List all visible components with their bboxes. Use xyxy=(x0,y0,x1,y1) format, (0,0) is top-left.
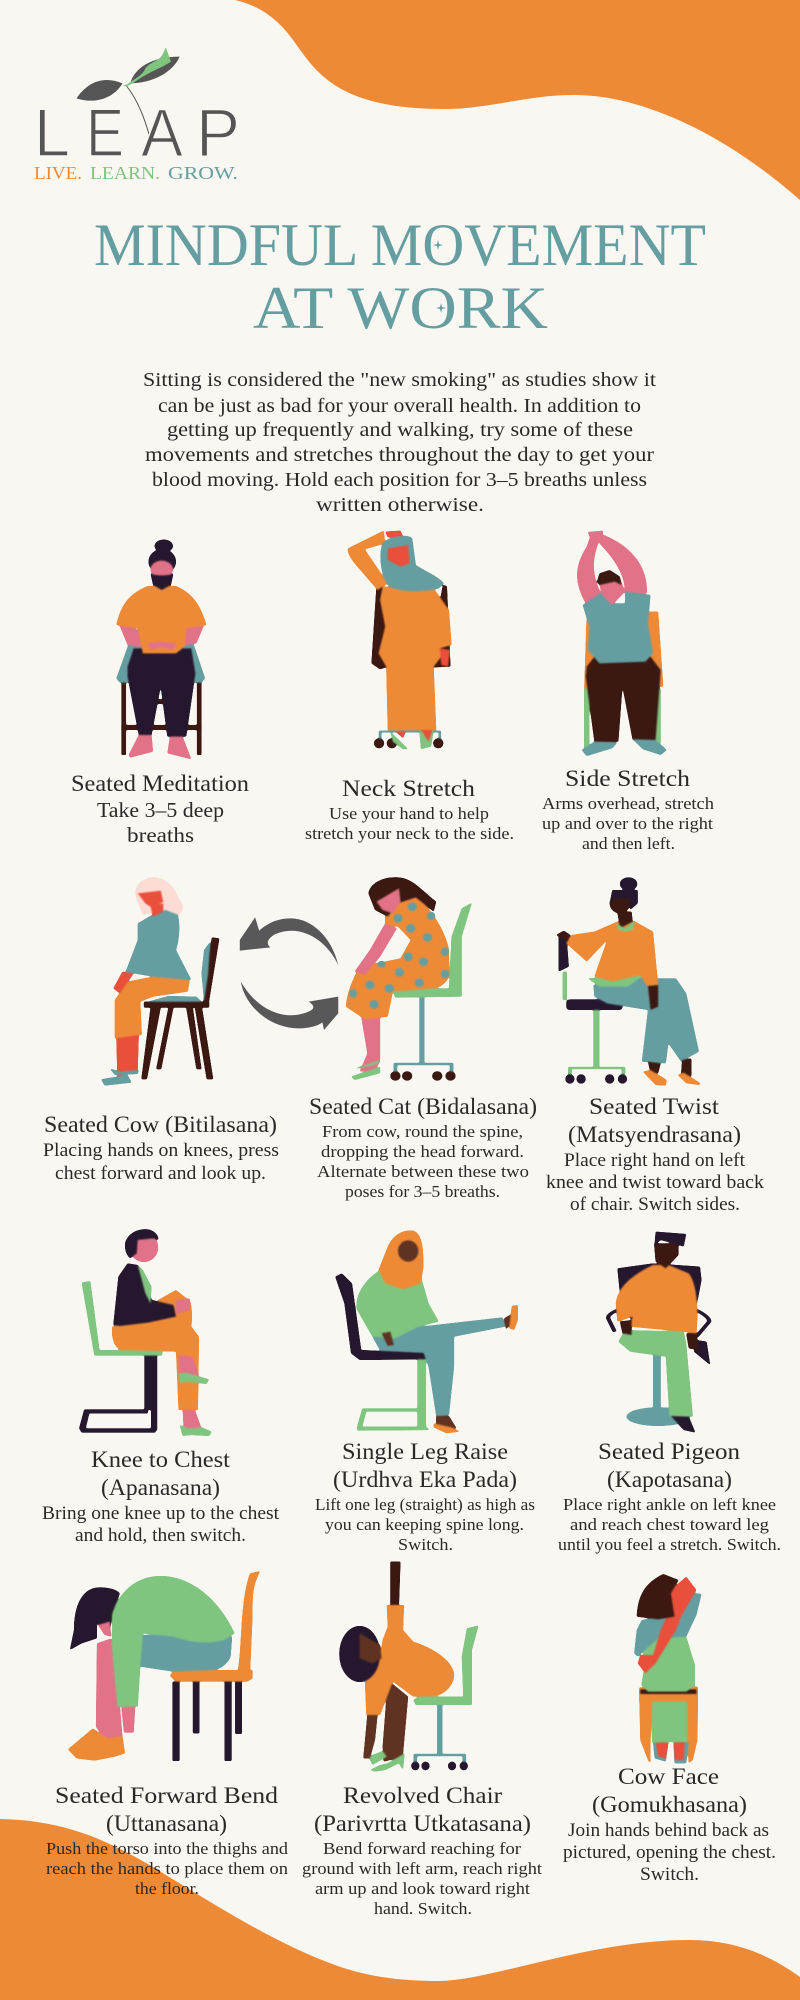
caption: Place right ankle on left knee xyxy=(563,1495,776,1514)
panel: side stretch xyxy=(542,531,715,853)
wordmark xyxy=(34,95,240,171)
caption: of chair. Switch sides. xyxy=(570,1194,740,1215)
tagline: LEARN. xyxy=(90,163,160,183)
intro paragraph: Sitting is considered the "new smoking" as studies show it xyxy=(143,369,656,391)
caption xyxy=(42,1447,280,1546)
caption xyxy=(315,1439,535,1554)
figure: woman twisting forward with arm raised xyxy=(339,1562,479,1772)
caption: until you feel a stretch. Switch. xyxy=(558,1535,781,1554)
tagline: LIVE. xyxy=(34,163,82,183)
caption: From cow, round the spine, xyxy=(322,1122,523,1141)
caption: Revolved Chair xyxy=(343,1783,502,1808)
caption: Bring one knee up to the chest xyxy=(42,1503,280,1524)
caption: Use your hand to help xyxy=(329,804,489,823)
wordmark: L xyxy=(34,95,70,171)
caption xyxy=(46,1783,289,1898)
caption: Seated Cat (Bidalasana) xyxy=(309,1094,537,1119)
title: MINDFUL MOVEMENT xyxy=(94,212,706,278)
wordmark: A xyxy=(141,95,184,171)
caption: Neck Stretch xyxy=(342,776,476,801)
wordmark: P xyxy=(196,95,240,171)
caption: reach the hands to place them on xyxy=(46,1859,289,1878)
panel: cow face xyxy=(563,1574,776,1885)
caption: Seated Twist xyxy=(589,1094,720,1119)
caption: Join hands behind back as xyxy=(568,1820,769,1841)
caption: Side Stretch xyxy=(565,766,691,791)
caption: Seated Meditation xyxy=(71,771,250,796)
intro paragraph: movements and stretches throughout the day to get your xyxy=(145,444,654,466)
caption: knee and twist toward back xyxy=(546,1172,765,1193)
tagline xyxy=(34,163,238,183)
caption: the floor. xyxy=(135,1879,199,1898)
caption xyxy=(546,1094,765,1215)
caption: Take 3–5 deep xyxy=(97,798,224,822)
panel: seated forward bend xyxy=(46,1571,289,1898)
intro paragraph: written otherwise. xyxy=(316,494,484,516)
figure: woman in hijab stretching neck xyxy=(348,531,452,749)
panel: seated pigeon xyxy=(558,1232,781,1554)
figure: person folded forward on chair xyxy=(68,1571,260,1761)
caption xyxy=(309,1094,537,1201)
panel: seated twist xyxy=(546,877,765,1215)
caption: you can keeping spine long. xyxy=(325,1515,524,1534)
caption: (Apanasana) xyxy=(101,1475,220,1500)
caption xyxy=(71,771,250,847)
caption: ground with left arm, reach right xyxy=(302,1859,542,1878)
caption xyxy=(563,1764,776,1885)
caption: Seated Pigeon xyxy=(598,1439,741,1464)
caption: Alternate between these two xyxy=(317,1162,529,1181)
intro paragraph: getting up frequently and walking, try some of these xyxy=(167,419,633,441)
panel: neck stretch xyxy=(305,531,514,843)
caption: Place right hand on left xyxy=(564,1150,746,1171)
caption: Seated Forward Bend xyxy=(55,1783,279,1808)
figure: woman raising straight leg xyxy=(335,1230,518,1433)
title xyxy=(94,212,706,341)
caption: and reach chest toward leg xyxy=(570,1515,770,1534)
wordmark: E xyxy=(86,95,124,171)
figure: man meditating on stool xyxy=(116,540,207,759)
caption: (Uttanasana) xyxy=(106,1811,227,1836)
intro paragraph xyxy=(143,369,656,516)
figure: woman hugging knee on cantilever chair xyxy=(79,1229,212,1436)
top orange wave xyxy=(235,0,800,200)
intro paragraph: blood moving. Hold each position for 3–5 breaths unless xyxy=(152,469,647,491)
caption: Seated Cow (Bitilasana) xyxy=(44,1112,277,1137)
figure: woman from behind with hands joined xyxy=(634,1574,702,1763)
caption: Arms overhead, stretch xyxy=(542,794,715,813)
intro paragraph: can be just as bad for your overall health. In addition to xyxy=(158,395,641,417)
caption: Switch. xyxy=(398,1535,453,1554)
caption: (Parivrtta Utkatasana) xyxy=(314,1811,531,1836)
caption: (Kapotasana) xyxy=(607,1467,732,1492)
panel: seated meditation xyxy=(71,540,250,847)
caption xyxy=(558,1439,781,1554)
caption: (Urdhva Eka Pada) xyxy=(333,1467,517,1492)
caption: Placing hands on knees, press xyxy=(43,1140,279,1161)
caption: (Matsyendrasana) xyxy=(568,1122,741,1147)
caption: Knee to Chest xyxy=(91,1447,231,1472)
panel: seated cat xyxy=(309,877,537,1201)
caption xyxy=(302,1783,542,1918)
caption: Cow Face xyxy=(618,1764,719,1789)
caption: pictured, opening the chest. xyxy=(563,1842,776,1863)
caption: and hold, then switch. xyxy=(75,1525,246,1546)
icon: leaves and lizard xyxy=(77,47,180,140)
caption: breaths xyxy=(127,823,194,847)
caption: dropping the head forward. xyxy=(321,1142,524,1161)
panel: single leg raise xyxy=(315,1230,535,1554)
caption xyxy=(305,776,514,843)
caption xyxy=(542,766,715,853)
caption: arm up and look toward right xyxy=(315,1879,530,1898)
figure: woman arching chest on chair xyxy=(101,877,219,1086)
figure: man stretching arms overhead xyxy=(577,531,667,756)
bottom orange wave xyxy=(0,1819,800,2000)
caption: chest forward and look up. xyxy=(55,1163,266,1184)
title: AT WORK xyxy=(253,275,548,341)
caption: and then left. xyxy=(582,834,675,853)
caption xyxy=(43,1112,279,1184)
caption: (Gomukhasana) xyxy=(592,1792,747,1817)
caption: Lift one leg (straight) as high as xyxy=(315,1495,535,1514)
tagline: GROW. xyxy=(168,163,238,183)
logo xyxy=(34,47,240,183)
caption: Push the torso into the thighs and xyxy=(46,1839,289,1858)
caption: Bend forward reaching for xyxy=(323,1839,521,1858)
caption: up and over to the right xyxy=(542,814,713,833)
panel: seated cow xyxy=(43,877,279,1184)
figure: man with ankle on knee on stool xyxy=(608,1232,710,1433)
caption: poses for 3–5 breaths. xyxy=(345,1182,500,1201)
figure: woman rounding spine on office chair xyxy=(346,877,472,1081)
figure: woman twisting on office stool xyxy=(556,877,701,1086)
caption: Switch. xyxy=(640,1864,699,1885)
caption: Single Leg Raise xyxy=(342,1439,508,1464)
panel: revolved chair xyxy=(302,1562,542,1918)
caption: stretch your neck to the side. xyxy=(305,824,514,843)
panel: knee to chest xyxy=(42,1229,280,1546)
caption: hand. Switch. xyxy=(374,1899,472,1918)
arrows: alternate between cow and cat xyxy=(240,917,338,1030)
